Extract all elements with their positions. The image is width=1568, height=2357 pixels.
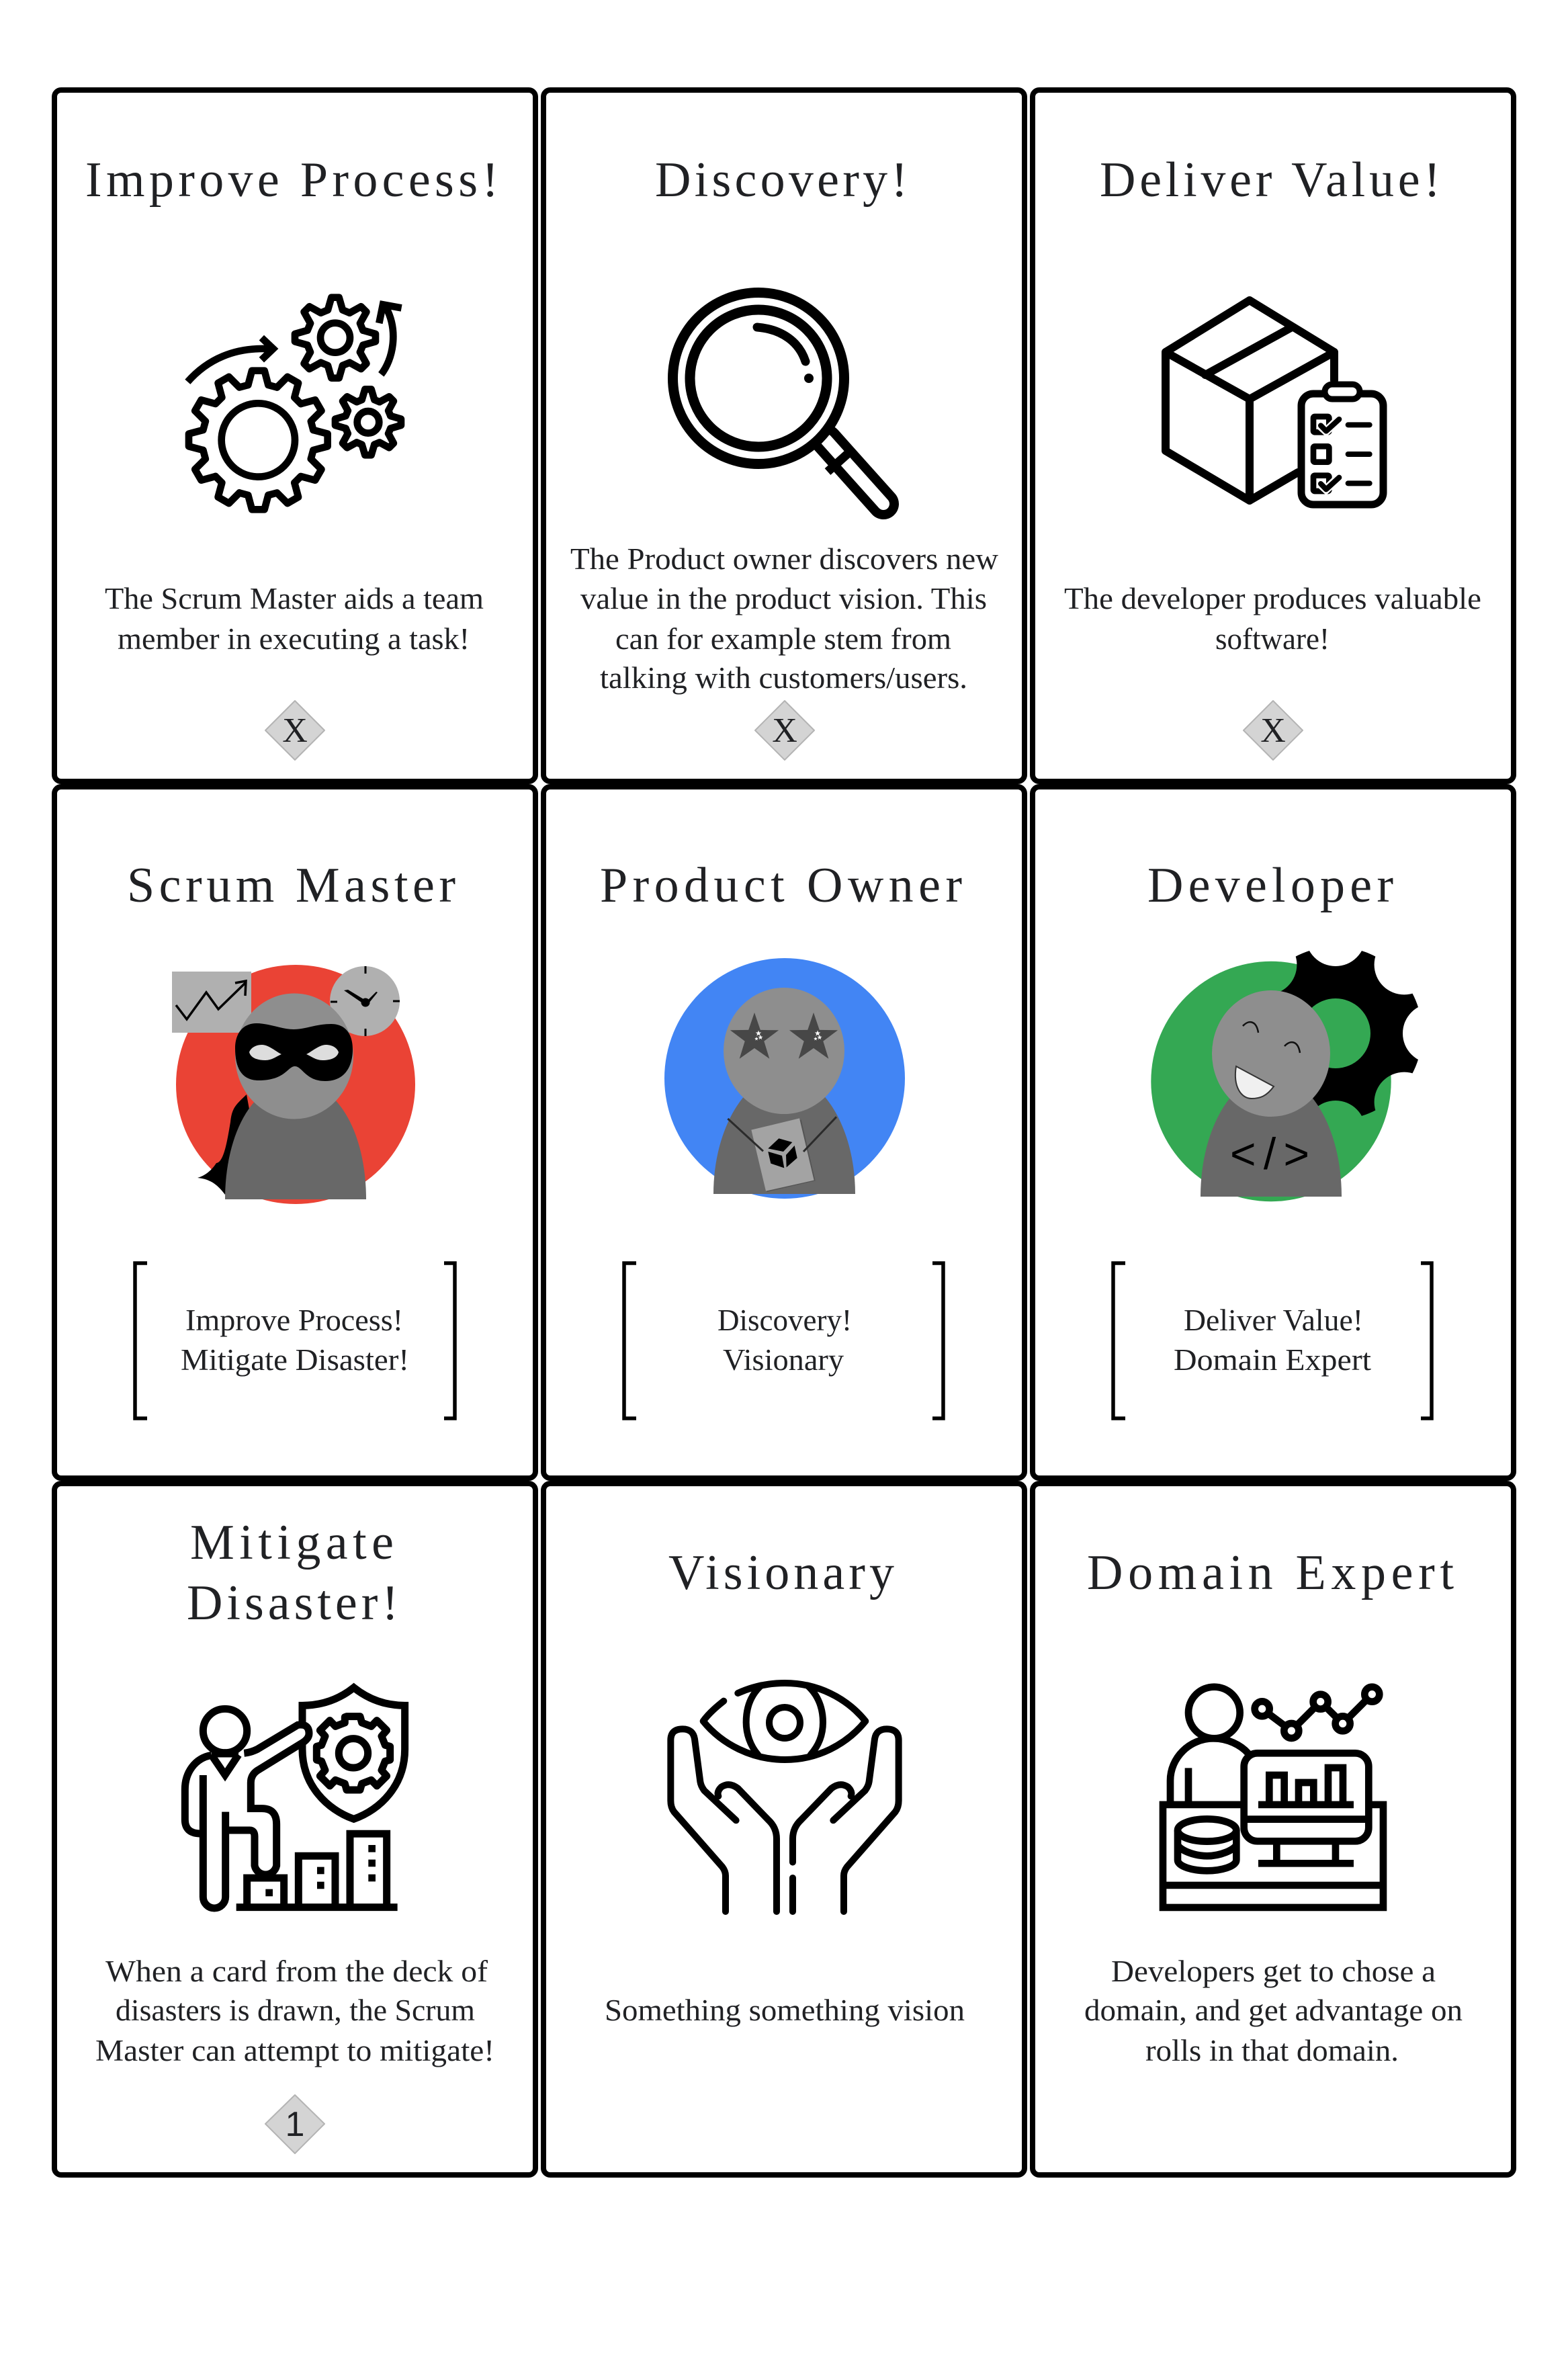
text: description — [105, 582, 484, 656]
icon: gears with arrows — [187, 298, 402, 509]
icon: box with checklist — [1166, 300, 1383, 505]
brackets: abilities — [1113, 1263, 1432, 1418]
text: description: Master can attempt to mitigate! — [95, 2034, 494, 2067]
panel: Mitigate Disaster card — [54, 1484, 535, 2175]
badge: X: X — [282, 712, 308, 750]
text: description: rolls in that domain. — [1145, 2034, 1399, 2067]
icon: analyst at desk with monitor, database and line chart — [1163, 1687, 1383, 1908]
badge: 1 — [265, 2095, 324, 2153]
panel: Scrum Master card — [54, 787, 535, 1478]
text: description: disasters is drawn, the Scrum — [116, 1994, 475, 2027]
heading: Mitigate Disaster: Disaster! — [187, 1576, 398, 1631]
illustration: smiling developer with gear — [1151, 951, 1418, 1201]
text: abilities — [181, 1303, 409, 1377]
panel: Visionary card — [543, 1484, 1025, 2175]
icon: eye above open hands — [670, 1683, 899, 1912]
icon: magnifying glass — [673, 293, 883, 504]
badge: X: X — [772, 712, 797, 750]
text: abilities: Improve Process! — [185, 1303, 403, 1337]
heading: Visionary: Visionary — [668, 1545, 894, 1600]
brackets: abilities — [624, 1263, 943, 1418]
text: description: domain, and get advantage on — [1084, 1994, 1463, 2027]
text: description: talking with customers/users. — [600, 661, 967, 695]
text: abilities — [717, 1303, 852, 1377]
heading: Discovery: Discovery! — [655, 153, 908, 208]
heading: Developer: Developer — [1147, 858, 1393, 913]
panel: Developer card — [1033, 787, 1514, 1478]
badge: X — [1244, 701, 1303, 760]
text: description: When a card from the deck of — [105, 1955, 488, 1988]
text: description — [1084, 1955, 1463, 2067]
icon: person pointing at shield with gear and buildings — [185, 1688, 405, 1908]
text: description: The Scrum Master aids a team — [105, 582, 484, 615]
text: abilities: Domain Expert — [1174, 1343, 1372, 1377]
heading: Mitigate Disaster — [187, 1515, 398, 1631]
text: abilities: Visionary — [723, 1343, 844, 1377]
text: description: Developers get to chose a — [1111, 1955, 1436, 1988]
heading: Product Owner: Product Owner — [600, 858, 962, 913]
text: description: value in the product vision. This — [580, 582, 987, 615]
text: description: The developer produces valuable — [1064, 582, 1481, 615]
text: description: member in executing a task! — [118, 622, 470, 656]
panel: Product Owner card — [543, 787, 1025, 1478]
illustration: product owner with star eyes — [664, 958, 905, 1199]
panel: Deliver Value card — [1033, 90, 1514, 781]
text: description: Something something vision — [605, 1994, 965, 2027]
badge: X — [755, 701, 814, 760]
heading: Deliver Value: Deliver Value! — [1100, 153, 1440, 208]
text: description — [95, 1955, 494, 2067]
text: description — [1064, 582, 1481, 656]
icon detail: checklist rows — [1313, 417, 1370, 491]
heading: Mitigate Disaster: Mitigate — [190, 1515, 394, 1570]
illustration: masked scrum master — [172, 965, 415, 1204]
panel: Improve Process card — [54, 90, 535, 781]
text: description — [570, 542, 999, 695]
heading: Improve Process: Improve Process! — [85, 153, 498, 208]
badge: 1: 1 — [286, 2105, 304, 2144]
heading: Scrum Master: Scrum Master — [127, 858, 455, 913]
badge: X: X — [1260, 712, 1286, 750]
badge: X — [265, 701, 324, 760]
panel: Discovery card — [543, 90, 1025, 781]
text: abilities — [1174, 1303, 1372, 1377]
heading: Domain Expert: Domain Expert — [1087, 1545, 1454, 1600]
text: description: The Product owner discovers new — [570, 542, 999, 576]
text: description: software! — [1215, 622, 1330, 656]
illustration: smiling developer with gear: < / > — [1230, 1129, 1309, 1178]
brackets: abilities — [135, 1263, 455, 1418]
text: abilities: Mitigate Disaster! — [181, 1343, 409, 1377]
text: abilities: Discovery! — [717, 1303, 852, 1337]
panel: Domain Expert card — [1033, 1484, 1514, 2175]
text: abilities: Deliver Value! — [1184, 1303, 1363, 1337]
text: description: can for example stem from — [615, 622, 951, 656]
